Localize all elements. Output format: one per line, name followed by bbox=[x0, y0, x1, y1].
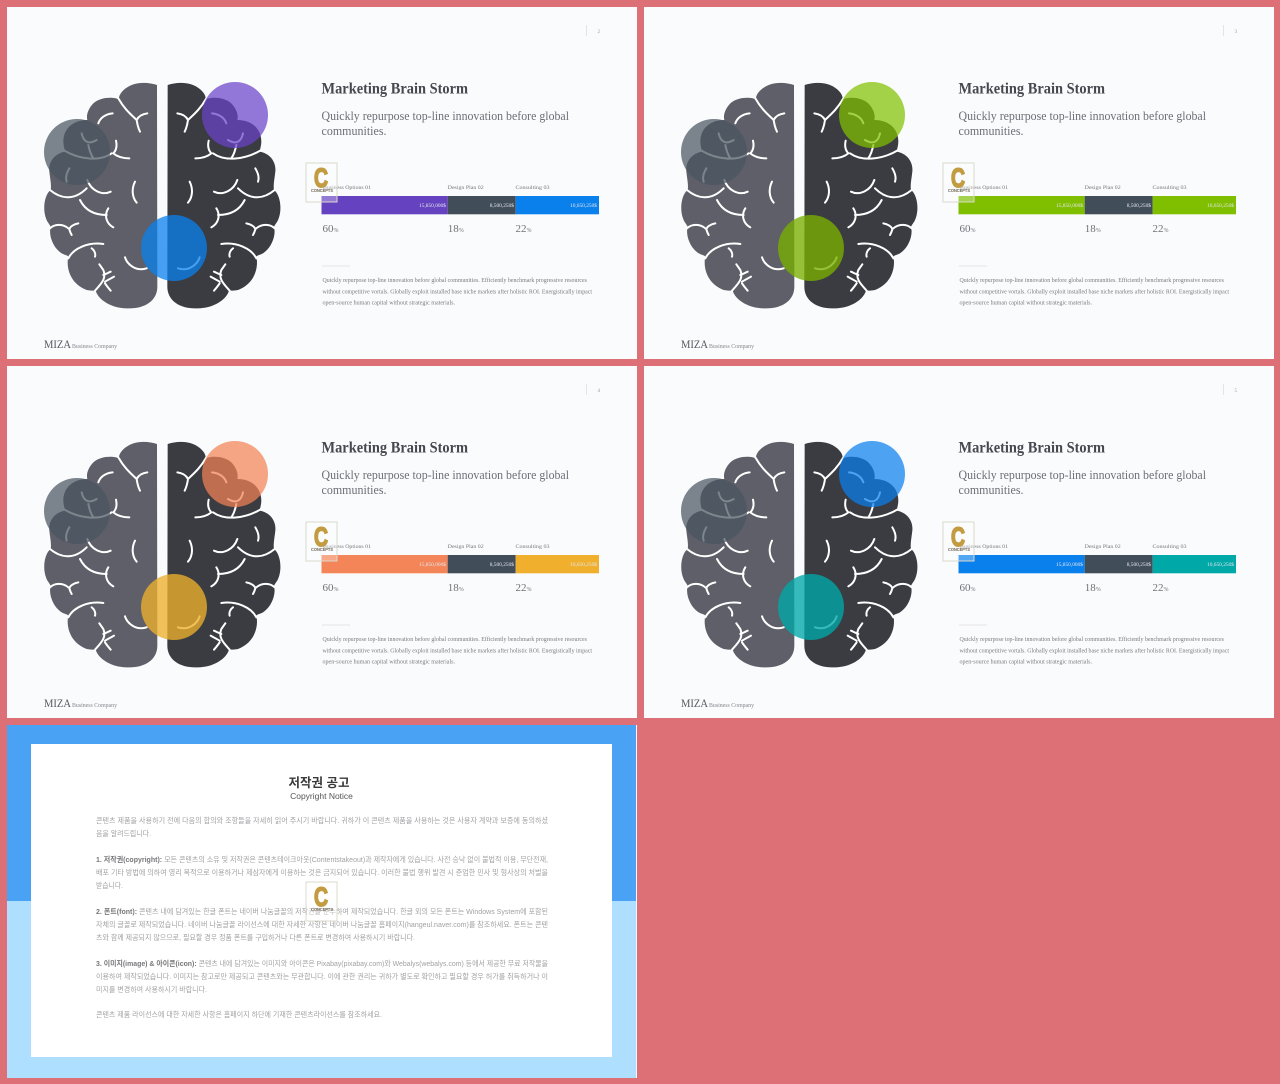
subtitle bbox=[322, 108, 569, 138]
stacked bar chart: 8,500,250$ bbox=[1127, 202, 1151, 209]
body paragraph bbox=[322, 636, 592, 666]
stacked bar chart: 18% bbox=[448, 582, 464, 594]
body paragraph: Quickly repurpose top-line innovation before global communities. Efficiently benchmark progressive resources bbox=[322, 277, 588, 284]
watermark logo bbox=[306, 882, 337, 921]
stacked bar chart: Business Options 01 bbox=[323, 544, 371, 550]
copyright heading: 저작권 공고 bbox=[289, 775, 349, 790]
copyright section 2 bbox=[96, 906, 548, 942]
subtitle bbox=[958, 467, 1206, 497]
copyright section 3: 이용하여 제작되었습니다. 이미지는 참고로만 제공되고 콘텐츠와는 무관합니다. 이에 관한 권리는 귀하가 별도로 확인하고 필요할 경우 허가를 취득하거나 이 bbox=[96, 971, 548, 981]
body paragraph bbox=[960, 636, 1229, 666]
copyright heading: Copyright Notice bbox=[290, 791, 353, 801]
subtitle: Quickly repurpose top-line innovation before global bbox=[322, 467, 569, 482]
page number: 3 bbox=[1234, 30, 1238, 35]
body paragraph: open-source human capital without strategic materials. bbox=[322, 300, 455, 306]
stacked bar chart: 8,500,250$ bbox=[490, 561, 514, 568]
copyright section 2: 츠와 함께 제공되지 않으므로, 필요할 경우 정품 폰트를 구입하거나 다른 폰트로 변경하여 사용하시기 바랍니다. bbox=[96, 932, 415, 942]
stacked bar chart: Design Plan 02 bbox=[448, 185, 484, 191]
watermark logo: CONCEPTS bbox=[311, 547, 333, 552]
stacked bar chart: 60% bbox=[322, 223, 338, 235]
panel: slide 3 green bbox=[644, 7, 1274, 359]
watermark logo: C bbox=[314, 882, 328, 912]
stacked bar chart: 22% bbox=[516, 223, 532, 235]
body paragraph: Quickly repurpose top-line innovation before global communities. Efficiently benchmark progressive resources bbox=[960, 636, 1225, 643]
subtitle: communities. bbox=[958, 482, 1024, 497]
page number: 5 bbox=[1234, 389, 1238, 394]
watermark logo: C bbox=[951, 522, 965, 552]
stacked bar chart: 15,850,000$ bbox=[419, 561, 446, 568]
copyright intro text: 음을 알려드립니다. bbox=[96, 828, 151, 838]
panel: slide 4 orange and yellow bbox=[7, 366, 637, 718]
stacked bar chart: 22% bbox=[1152, 223, 1168, 235]
stacked bar chart: 8,500,250$ bbox=[1127, 561, 1151, 568]
stacked bar chart: 8,500,250$ bbox=[490, 202, 514, 209]
watermark logo: CONCEPTS bbox=[948, 188, 970, 193]
subtitle: Quickly repurpose top-line innovation before global bbox=[322, 108, 569, 123]
heading: Marketing Brain Storm bbox=[322, 80, 468, 98]
subtitle bbox=[322, 467, 569, 497]
watermark logo: CONCEPTS bbox=[948, 547, 970, 552]
stacked bar chart bbox=[958, 185, 1236, 235]
copyright heading bbox=[289, 775, 353, 801]
stacked bar chart: Business Options 01 bbox=[323, 185, 371, 191]
stacked bar chart: Consulting 03 bbox=[516, 185, 550, 191]
watermark logo bbox=[943, 522, 974, 561]
heading: Marketing Brain Storm bbox=[958, 440, 1105, 456]
stacked bar chart: 60% bbox=[960, 582, 976, 594]
stacked bar chart: 60% bbox=[960, 223, 976, 235]
watermark logo bbox=[306, 163, 337, 202]
subtitle: communities. bbox=[322, 482, 386, 497]
body paragraph: Quickly repurpose top-line innovation before global communities. Efficiently benchmark progressive resources bbox=[960, 277, 1225, 284]
stacked bar chart: Design Plan 02 bbox=[1085, 185, 1121, 191]
stacked bar chart: 10,650,250$ bbox=[570, 202, 597, 209]
footer brand: Business Company bbox=[709, 344, 754, 350]
copyright section 3: 미지를 변경하여 사용하시기 바랍니다. bbox=[96, 984, 207, 994]
stacked bar chart: Consulting 03 bbox=[1152, 544, 1187, 550]
copyright section 2: 자체의 글꼴로 제작되었습니다. 네이버 나눔글꼴 라이선스에 대한 자세한 사항은 네이버 나눔글꼴 홈페이지(hangeul.naver.com)를 참조하세요. 폰트는 콘텐 bbox=[96, 919, 548, 929]
stacked bar chart bbox=[322, 185, 599, 235]
stacked bar chart: 15,850,000$ bbox=[1056, 561, 1083, 568]
body paragraph: without competitive vortals. Globally exploit installed base niche markets after holistic ROI. Energistically impact bbox=[322, 288, 592, 295]
copyright intro text: 콘텐츠 제품을 사용하기 전에 다음의 합의와 조항들을 자세히 읽어 주시기 바랍니다. 귀하가 이 콘텐츠 제품을 사용하는 것은 사용자 계약과 보증에 동의하셨 bbox=[96, 815, 548, 825]
copyright section 1 bbox=[96, 854, 548, 890]
subtitle bbox=[958, 108, 1206, 138]
page number bbox=[1223, 384, 1238, 395]
panel: copyright notice bbox=[7, 725, 637, 1078]
subtitle: Quickly repurpose top-line innovation before global bbox=[958, 467, 1206, 482]
body paragraph: without competitive vortals. Globally exploit installed base niche markets after holistic ROI. Energistically impact bbox=[322, 647, 592, 654]
heading: Marketing Brain Storm bbox=[958, 80, 1105, 98]
watermark logo bbox=[943, 163, 974, 202]
body paragraph bbox=[960, 277, 1229, 306]
copyright section 1: 1. 저작권(copyright): 모든 콘텐츠의 소유 및 저작권은 콘텐츠테이크아웃(Contentstakeout)과 제작자에게 있습니다. 사전 승낙 없이 불법적 이용, 무단전재, bbox=[96, 854, 548, 864]
footer brand bbox=[44, 339, 117, 351]
page number: 2 bbox=[598, 30, 600, 35]
body paragraph: without competitive vortals. Globally exploit installed base niche markets after holistic ROI. Energistically impact bbox=[960, 288, 1229, 295]
copyright section 3: 3. 이미지(image) & 아이콘(icon): 콘텐츠 내에 담겨있는 이미지와 아이콘은 Pixabay(pixabay.com)와 Webalys(webalys.com) 등에서 제공한 무료 저작물을 bbox=[96, 958, 548, 968]
stacked bar chart: 10,650,250$ bbox=[1207, 561, 1234, 568]
stacked bar chart: Business Options 01 bbox=[960, 185, 1008, 191]
heading: Marketing Brain Storm bbox=[322, 440, 468, 456]
page number: 4 bbox=[598, 389, 600, 394]
copyright section 3 bbox=[96, 958, 548, 994]
stacked bar chart: Consulting 03 bbox=[1152, 185, 1187, 191]
watermark logo: C bbox=[314, 163, 328, 193]
footer brand: MIZA bbox=[681, 339, 709, 351]
footer brand bbox=[681, 339, 754, 351]
subtitle: Quickly repurpose top-line innovation before global bbox=[958, 108, 1206, 123]
stacked bar chart: 15,850,000$ bbox=[1056, 202, 1083, 209]
body paragraph: Quickly repurpose top-line innovation before global communities. Efficiently benchmark progressive resources bbox=[322, 636, 588, 643]
copyright intro text bbox=[96, 815, 548, 838]
stacked bar chart: Design Plan 02 bbox=[448, 544, 484, 550]
stacked bar chart: 22% bbox=[1152, 582, 1168, 594]
copyright section 1: 받습니다. bbox=[96, 880, 123, 890]
panel: slide 2 purple and blue bbox=[7, 7, 637, 359]
brain illustration bbox=[681, 441, 917, 667]
page number bbox=[1223, 25, 1238, 36]
footer brand: Business Company bbox=[72, 703, 117, 709]
copyright section 2: 2. 폰트(font): 콘텐츠 내에 담겨있는 한글 폰트는 네이버 나눔글꼴의 저작권을 준수하여 제작되었습니다. 한글 외의 모든 폰트는 Windows System에 포함된 bbox=[96, 906, 548, 916]
body paragraph: open-source human capital without strategic materials. bbox=[960, 660, 1092, 666]
panel: slide 5 blue and teal bbox=[644, 366, 1274, 718]
stacked bar chart: 22% bbox=[516, 582, 532, 594]
page number bbox=[586, 384, 600, 395]
stacked bar chart: 15,850,000$ bbox=[419, 202, 446, 209]
stacked bar chart: 18% bbox=[448, 223, 464, 235]
stacked bar chart bbox=[958, 544, 1236, 594]
watermark logo: C bbox=[314, 522, 328, 552]
watermark logo: CONCEPTS bbox=[311, 907, 333, 912]
stacked bar chart: 10,650,250$ bbox=[1207, 202, 1234, 209]
footer brand: MIZA bbox=[44, 339, 72, 351]
subtitle: communities. bbox=[322, 123, 386, 138]
stacked bar chart bbox=[322, 544, 599, 594]
stacked bar chart: Business Options 01 bbox=[960, 544, 1008, 550]
copyright closing line: 콘텐츠 제품 라이선스에 대한 자세한 사항은 홈페이지 하단에 기재한 콘텐츠라이선스를 참조하세요. bbox=[96, 1009, 382, 1019]
body paragraph: without competitive vortals. Globally exploit installed base niche markets after holistic ROI. Energistically impact bbox=[960, 647, 1229, 654]
stacked bar chart: 18% bbox=[1085, 582, 1101, 594]
watermark logo: CONCEPTS bbox=[311, 188, 333, 193]
body paragraph: open-source human capital without strategic materials. bbox=[322, 660, 455, 666]
brain illustration bbox=[44, 441, 280, 667]
copyright section 1: 배포 기타 방법에 의하여 영리 목적으로 이용하거나 제삼자에게 이용하는 것은 금지되어 있습니다. 이러한 불법 행위 발견 시 준엄한 민사 및 형사상의 처벌을 bbox=[96, 867, 548, 877]
body paragraph bbox=[322, 277, 592, 306]
stacked bar chart: Design Plan 02 bbox=[1085, 544, 1121, 550]
stacked bar chart: 18% bbox=[1085, 223, 1101, 235]
stacked bar chart: 10,650,250$ bbox=[570, 561, 597, 568]
stacked bar chart: Consulting 03 bbox=[516, 544, 550, 550]
watermark logo: C bbox=[951, 163, 965, 193]
page number bbox=[586, 25, 600, 36]
brain illustration bbox=[681, 82, 917, 308]
footer brand: MIZA bbox=[681, 698, 709, 710]
footer brand: Business Company bbox=[709, 703, 754, 709]
footer brand bbox=[44, 698, 117, 710]
footer brand bbox=[681, 698, 754, 710]
subtitle: communities. bbox=[958, 123, 1024, 138]
stacked bar chart: 60% bbox=[322, 582, 338, 594]
brain illustration bbox=[44, 82, 280, 308]
watermark logo bbox=[306, 522, 337, 561]
footer brand: MIZA bbox=[44, 698, 72, 710]
footer brand: Business Company bbox=[72, 344, 117, 350]
body paragraph: open-source human capital without strategic materials. bbox=[960, 300, 1092, 306]
